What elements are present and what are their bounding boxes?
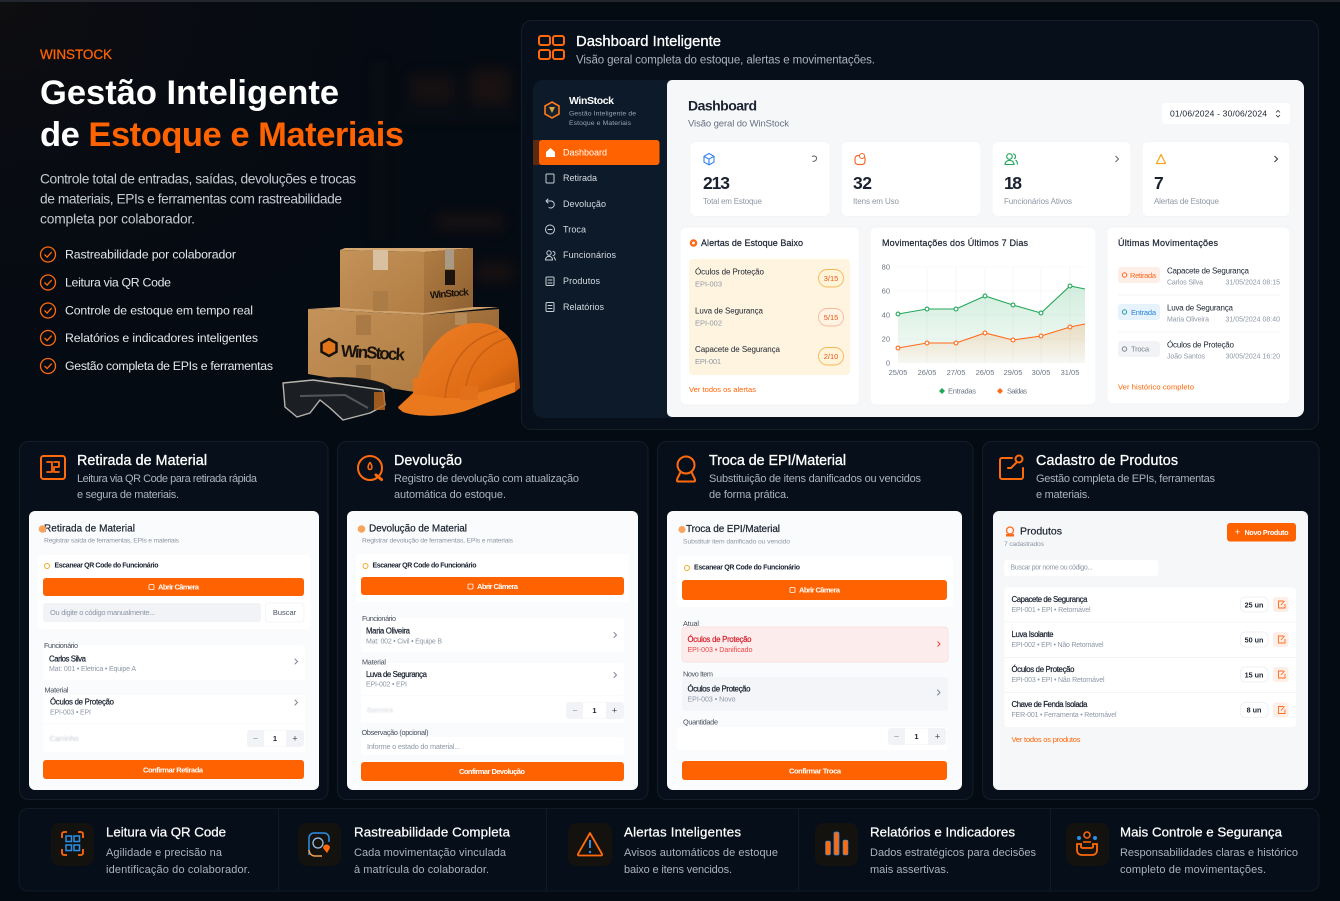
cadastro heading (1036, 453, 1216, 501)
link: ver produtos: Ver todos os produtos (1012, 735, 1081, 744)
benefit: relatórios: Relatórios e Indicadores (870, 824, 1015, 840)
y axis labels: 40 (882, 310, 890, 320)
x axis labels: 31/05 (1061, 368, 1079, 377)
product: óculos: EPI-003 • EPI • Não Retornável (1012, 677, 1105, 684)
material field: Óculos de Proteção (50, 698, 115, 706)
product: óculos: Óculos de Proteção (1012, 665, 1075, 674)
benefit: controle: Mais Controle e Segurança (1120, 824, 1283, 840)
sidebar (533, 80, 672, 418)
search input (1004, 560, 1158, 576)
benefit: controle: Responsabilidades claras e histórico (1120, 847, 1298, 859)
alert: luva: 5/15 (824, 313, 838, 322)
movement: troca: Óculos de Proteção (1167, 340, 1235, 350)
date range selector: 01/06/2024 - 30/06/2024 (1170, 108, 1267, 118)
cadastro heading: Cadastro de Produtos (1036, 453, 1178, 469)
benefit: rastreabilidade: à matrícula do colaborador. (354, 864, 489, 876)
logo: WinStock (569, 95, 614, 107)
employee field: Carlos Silva (49, 654, 87, 664)
quantity: + (935, 732, 940, 742)
panel: benefits strip (19, 808, 1319, 891)
devolução heading: Devolução (394, 453, 462, 469)
new item: Óculos de Proteção (688, 684, 751, 694)
panel: cadastro de produtos (982, 442, 1319, 800)
hero section (40, 47, 404, 374)
description: de materiais, EPIs e ferramentas com rastreabilidade (40, 192, 342, 206)
dashboard heading (576, 34, 875, 66)
product: capacete: Capacete de Segurança (1012, 595, 1088, 604)
benefit: alertas: Avisos automáticos de estoque (624, 847, 778, 859)
x axis labels: 29/05 (1004, 368, 1022, 377)
menu: active dashboard: Dashboard (563, 148, 607, 158)
headline: Gestão Inteligente (40, 74, 339, 112)
logo: Estoque e Materiais (569, 120, 632, 127)
stat: funcionários ativos: Funcionários Ativos (1004, 197, 1072, 206)
product: óculos: 15 un (1245, 670, 1263, 680)
chart heading: Movimentações dos Últimos 7 Dias (882, 238, 1028, 248)
item: relatórios: Relatórios e indicadores inteligentes (65, 331, 258, 345)
observation field (361, 728, 624, 755)
new product button: Novo Produto (1244, 528, 1289, 537)
product: luva: Luva Isolante (1012, 630, 1054, 639)
benefit: qr code: identificação do colaborador. (106, 864, 250, 876)
quantity: + (292, 734, 298, 744)
benefit: alertas: baixo e itens vencidos. (624, 864, 732, 876)
employee field: Funcionário (362, 614, 396, 623)
devolução heading: Registro de devolução com atualização (394, 473, 579, 485)
scan box: Abrir Câmera (158, 582, 200, 592)
logo: Gestão Inteligente de (569, 110, 636, 118)
panel: troca (658, 442, 973, 800)
screen title: Registrar saída de ferramentas, EPIs e materiais (44, 538, 180, 544)
product: luva: 50 un (1245, 636, 1263, 644)
item: rastreabilidade: Rastreabilidade por colaborador (65, 248, 236, 262)
new item (682, 670, 948, 711)
screen title (1004, 526, 1062, 548)
x axis labels: 26/05 (976, 368, 994, 377)
screen title: 7 cadastrados (1004, 541, 1045, 548)
y axis labels: 60 (882, 286, 890, 296)
confirm button: Confirmar Devolução (459, 767, 525, 776)
employee field (361, 614, 624, 652)
description: Controle total de entradas, saídas, devoluções e trocas (40, 172, 356, 186)
logo (545, 95, 636, 127)
screen: retirada (29, 511, 319, 790)
retirada heading (77, 453, 258, 501)
panel: dashboard (522, 20, 1318, 430)
product: chave: Chave de Fenda Isolada (1012, 700, 1088, 709)
product: luva: EPI-002 • EPI • Não Retornável (1012, 642, 1104, 649)
new product button (1227, 523, 1296, 542)
stat: alertas de estoque (1142, 142, 1290, 216)
current item: Óculos de Proteção (688, 635, 752, 644)
troca heading (709, 453, 922, 501)
cadastro heading: Gestão completa de EPIs, ferramentas (1036, 473, 1216, 485)
quantity: − (894, 732, 899, 742)
scan box: Abrir Câmera (477, 582, 519, 591)
menu: retirada: Retirada (563, 173, 597, 183)
new product button: + (1235, 527, 1240, 537)
menu: devolução: Devolução (563, 199, 606, 209)
quantity: Barreira (367, 706, 394, 714)
main title: Dashboard (688, 98, 757, 114)
screen title (358, 524, 514, 544)
screen title: Produtos (1020, 526, 1062, 538)
screen: produtos (993, 511, 1308, 790)
benefit: relatórios: mais assertivas. (870, 864, 949, 876)
benefit: rastreabilidade: Rastreabilidade Completa (354, 824, 511, 840)
employee field: Mat: 001 • Eletrica • Equipe A (49, 666, 136, 673)
screen: troca (667, 511, 962, 790)
material field: EPI-003 • EPI (50, 710, 91, 716)
retirada heading: e segura de materiais. (77, 489, 179, 501)
benefit: alertas (568, 823, 778, 876)
panel: low stock alerts (680, 227, 860, 405)
benefit: relatórios (815, 823, 1036, 876)
benefit: rastreabilidade (298, 823, 511, 876)
link: histórico: Ver histórico completo (1118, 382, 1194, 392)
item: tempo real: Controle de estoque em tempo real (65, 304, 253, 318)
observation field: Informe o estado do material... (367, 742, 460, 751)
confirm button (361, 762, 624, 781)
employee field: Maria Oliveira (366, 626, 411, 636)
observation field: Observação (opcional) (362, 728, 428, 737)
product: capacete: EPI-001 • EPI • Retornável (1012, 607, 1091, 614)
movement: entrada (1118, 304, 1280, 324)
scan box: Escanear QR Code do Funcionário (372, 562, 476, 570)
confirm button (682, 761, 947, 780)
retirada heading: Leitura via QR Code para retirada rápida (77, 473, 258, 485)
lower box (308, 307, 499, 392)
headline: de Estoque e Materiais (40, 116, 404, 154)
material field (361, 658, 624, 695)
date range selector (1162, 103, 1290, 124)
movement: retirada (1118, 266, 1280, 286)
icon: qr retirada (41, 456, 65, 479)
alert: óculos (695, 268, 844, 288)
quantity: 1 (273, 734, 277, 743)
movement: entrada: 31/05/2024 08:40 (1226, 316, 1280, 324)
panel: devolução (338, 442, 648, 800)
link: ver alertas: Ver todos os alertas (689, 385, 756, 394)
menu: relatórios: Relatórios (563, 302, 604, 312)
legend (939, 386, 1027, 396)
item: qr code: Leitura via QR Code (65, 276, 171, 290)
stat: itens em uso (841, 142, 981, 216)
employee field: Funcionário (44, 641, 78, 650)
movement: entrada: Entrada (1131, 308, 1157, 317)
menu: troca (546, 224, 586, 234)
scan box: Escanear QR Code do Funcionário (694, 564, 800, 572)
employee field (43, 641, 305, 680)
product: capacete: 25 un (1245, 600, 1263, 610)
alert: luva (695, 306, 844, 328)
upper box: WinStock (430, 287, 470, 301)
new item: Novo Item (683, 670, 713, 678)
benefit: qr code: Agilidade e precisão na (106, 847, 223, 859)
hard hat (398, 323, 520, 416)
chart: movimentações (870, 227, 1096, 405)
warehouse backdrop (375, 60, 520, 281)
material field (43, 686, 305, 723)
product: chave (1012, 700, 1288, 719)
scan box: Abrir Câmera (799, 586, 841, 594)
alert rows (689, 259, 850, 375)
brand label: WINSTOCK (40, 47, 112, 62)
stat: alertas de estoque: 7 (1154, 173, 1164, 193)
stat: funcionários ativos (992, 142, 1131, 216)
troca heading: Substituição de itens danificados ou vencidos (709, 473, 922, 485)
alert: capacete: EPI-001 (695, 357, 721, 366)
movement: retirada: Capacete de Segurança (1167, 266, 1250, 276)
alerts heading: Alertas de Estoque Baixo (701, 238, 803, 248)
product: óculos (1012, 665, 1288, 684)
area fills (898, 286, 1085, 363)
quantity: 1 (914, 732, 919, 741)
search input: Buscar por nome ou código... (1010, 564, 1093, 572)
lower box: WinStock (340, 342, 406, 364)
x axis labels: 27/05 (947, 368, 965, 377)
x axis labels: 26/05 (918, 368, 936, 377)
headline (40, 74, 404, 154)
confirm button (43, 760, 304, 779)
benefit: relatórios: Dados estratégicos para decisões (870, 847, 1036, 859)
y axis labels (882, 262, 890, 368)
alert: capacete (695, 345, 844, 366)
menu: produtos (546, 276, 600, 286)
benefit: controle: completo de movimentações. (1120, 864, 1266, 876)
alert: luva: EPI-002 (695, 318, 722, 328)
main title: Visão geral do WinStock (688, 118, 789, 130)
product: chave: 8 un (1247, 706, 1261, 714)
icon: dashboard grid (539, 36, 564, 59)
stat: total em estoque: Total em Estoque (703, 197, 763, 206)
scan box (38, 555, 310, 629)
confirm button: Confirmar Retirada (143, 766, 204, 774)
material field: Material (362, 658, 386, 666)
stat: itens em uso: 32 (853, 173, 872, 193)
benefit: qr code (51, 823, 250, 876)
screen title: Substituir item danificado ou vencido (683, 538, 790, 546)
icon: troca (677, 456, 695, 482)
description: completa por colaborador. (40, 212, 195, 226)
scan box: Buscar (273, 608, 297, 617)
quantity (677, 718, 947, 750)
x axis labels: 25/05 (889, 368, 907, 377)
current item: Atual (683, 619, 699, 628)
stat: alertas de estoque: Alertas de Estoque (1154, 197, 1220, 206)
hero image: boxes, helmet and goggles (283, 248, 520, 420)
benefit: alertas: Alertas Inteligentes (624, 824, 741, 840)
product list (1004, 588, 1296, 727)
stat: itens em uso: Itens em Uso (853, 197, 900, 206)
y axis labels: 0 (886, 358, 890, 368)
retirada heading: Retirada de Material (77, 453, 207, 469)
movement: retirada: Carlos Silva (1167, 280, 1203, 286)
current item (682, 619, 948, 662)
current item: EPI-003 • Danificado (688, 647, 753, 654)
screen title (678, 524, 790, 546)
alert: luva: Luva de Segurança (695, 306, 764, 316)
movement: retirada: Retirada (1130, 271, 1157, 280)
troca heading: de forma prática. (709, 489, 789, 501)
product: chave: FER-001 • Ferramenta • Retornável (1012, 712, 1117, 719)
product: capacete (1012, 595, 1288, 614)
legend: Saídas (1007, 386, 1027, 396)
x axis labels: 30/05 (1032, 368, 1050, 377)
line: saídas (896, 324, 1085, 350)
upper box (340, 248, 473, 313)
product: luva (1012, 630, 1288, 649)
confirm button: Confirmar Troca (789, 766, 842, 776)
quantity: 1 (592, 706, 597, 715)
quantity (361, 696, 624, 723)
icon: cadastro (1000, 456, 1023, 479)
menu: funcionários: Funcionários (563, 250, 616, 260)
quantity: Carrinho (50, 734, 78, 743)
movement: retirada: 31/05/2024 08:15 (1226, 280, 1280, 286)
safety goggles (283, 377, 392, 420)
dashboard heading: Visão geral completa do estoque, alertas e movimentações. (576, 54, 875, 66)
scan box: Escanear QR Code do Funcionário (54, 562, 158, 570)
material field: Material (44, 686, 69, 694)
dashboard heading: Dashboard Inteligente (576, 34, 721, 50)
panel: últimas movimentações (1107, 227, 1290, 404)
alert: capacete: 2/10 (824, 352, 838, 361)
quantity: Quantidade (683, 718, 718, 726)
item: gestão: Gestão completa de EPIs e ferramentas (65, 359, 273, 373)
menu: troca: Troca (563, 224, 586, 234)
screen title: Troca de EPI/Material (686, 524, 780, 535)
stat: total em estoque: 213 (703, 173, 730, 193)
alert: óculos: 3/15 (824, 274, 838, 283)
movement: entrada: Luva de Segurança (1167, 304, 1234, 312)
line: entradas (896, 284, 1085, 316)
screen title (39, 524, 180, 544)
quantity (43, 724, 305, 752)
material field: EPI-002 • EPI (366, 682, 407, 688)
material field: Luva de Segurança (366, 670, 428, 679)
icon: devolução (358, 456, 382, 480)
movement: troca: Troca (1131, 344, 1150, 354)
cadastro heading: e materiais. (1036, 489, 1090, 501)
movement: troca: João Santos (1167, 354, 1206, 360)
alert: óculos: EPI-003 (695, 280, 722, 288)
dashboard main area (667, 80, 1304, 417)
menu: retirada (546, 173, 597, 183)
movement: troca (1118, 340, 1280, 360)
scan box (677, 556, 953, 607)
troca heading: Troca de EPI/Material (709, 453, 846, 469)
checklist (40, 247, 273, 374)
menu: active dashboard (533, 140, 660, 165)
description (40, 172, 356, 226)
quantity: + (612, 706, 617, 716)
menu: produtos: Produtos (563, 276, 600, 286)
stat: total em estoque (690, 142, 830, 216)
benefit: controle (1066, 823, 1298, 876)
movement: entrada: Maria Oliveira (1167, 316, 1209, 324)
movement: troca: 30/05/2024 16:20 (1226, 354, 1280, 360)
employee field: Mat: 002 • Civil • Equipe B (366, 638, 442, 646)
legend: Entradas (948, 386, 976, 396)
screen title: Retirada de Material (44, 524, 135, 534)
alert: óculos: Óculos de Proteção (695, 268, 765, 276)
scan box: Ou digite o código manualmente... (50, 608, 155, 617)
main title (688, 98, 789, 130)
y axis labels: 80 (882, 262, 890, 272)
scan box (356, 554, 629, 602)
devolução heading (394, 453, 579, 501)
new item: EPI-003 • Novo (688, 696, 736, 704)
movements heading: Últimas Movimentações (1118, 238, 1218, 248)
screen title: Registrar devolução de ferramentas, EPIs e materiais (362, 538, 514, 544)
x axis labels (889, 368, 1079, 377)
screen: devolução (347, 511, 638, 790)
screen title: Devolução de Material (369, 524, 467, 534)
y axis labels: 20 (882, 334, 890, 344)
panel: retirada de material (20, 442, 328, 800)
benefit: rastreabilidade: Cada movimentação vinculada (354, 847, 507, 859)
stat: funcionários ativos: 18 (1004, 173, 1022, 193)
benefit: qr code: Leitura via QR Code (106, 824, 226, 840)
devolução heading: automática do estoque. (394, 489, 506, 501)
quantity: − (572, 706, 578, 716)
alert: capacete: Capacete de Segurança (695, 345, 781, 354)
quantity: − (253, 734, 258, 744)
